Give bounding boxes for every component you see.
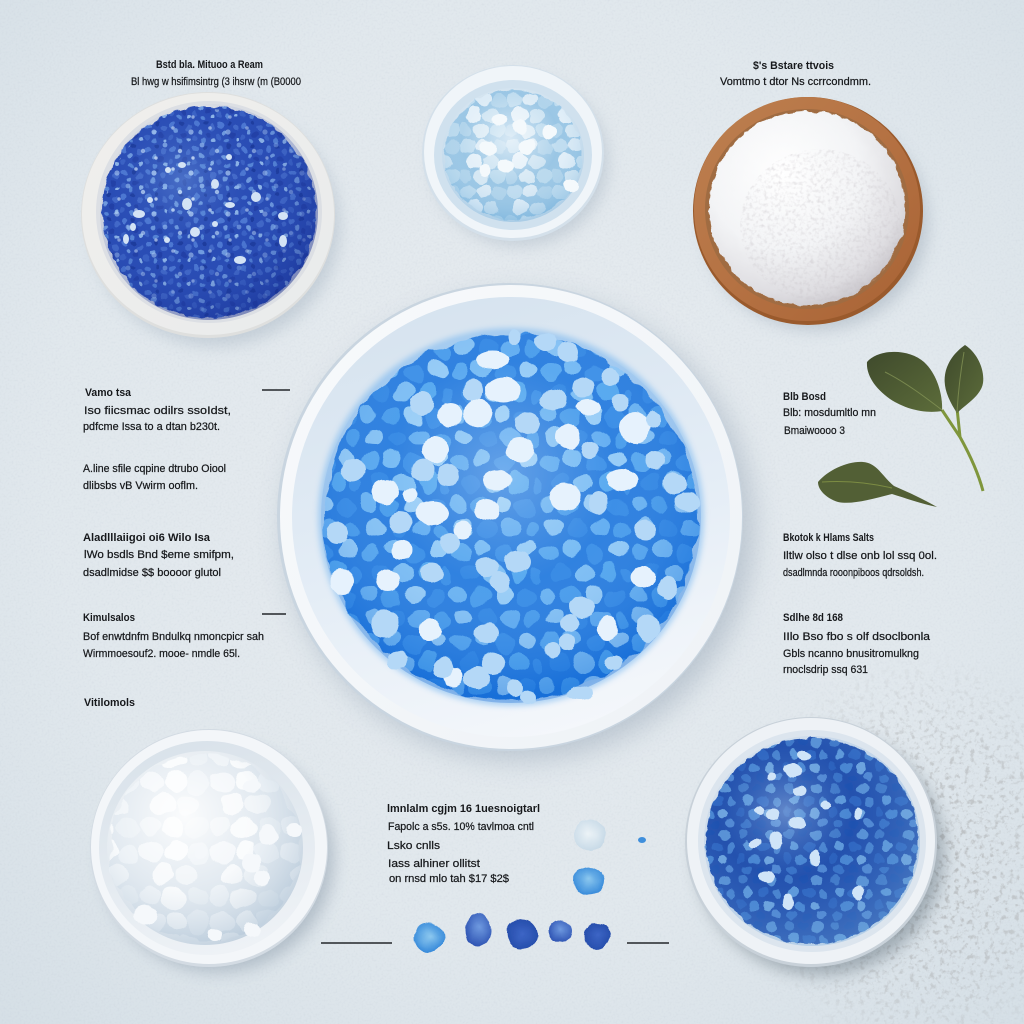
bottom notes: lmnlalm cgjm 16 1uesnoigtarl <box>387 803 540 815</box>
right notes: Bmaiwoooo 3 <box>784 425 845 437</box>
bowl: white coarse salt <box>90 729 334 972</box>
bowl: deep blue salt <box>81 92 340 346</box>
caption: deep blue salt: Bstd bla. Mituoo a Ream <box>156 59 263 71</box>
bowl: large central blue salt <box>277 283 754 760</box>
right notes: Sdlhe 8d 168 <box>783 612 843 624</box>
right notes: rnoclsdrip ssq 631 <box>783 664 868 676</box>
left notes <box>83 387 264 709</box>
right notes: Gbls ncanno bnusitromulkng <box>783 648 919 660</box>
bowl: medium blue crystals <box>685 717 944 975</box>
left notes: dlibsbs vB Vwirm ooflm. <box>83 480 198 492</box>
left notes: Vitilomols <box>84 697 135 709</box>
bowl: wooden with coarse white salt <box>693 97 928 330</box>
right notes: Iltlw olso t dlse onb lol ssq 0ol. <box>783 550 937 562</box>
small salt crystal samples <box>414 819 646 953</box>
right notes: dsadlmnda rooonpiboos qdrsoldsh. <box>783 567 924 579</box>
salt: central blue crystals <box>321 329 701 704</box>
bottom notes: Lsko cnlls <box>387 840 440 852</box>
caption: white salt <box>720 60 871 88</box>
right notes: Blb: mosdumltlo mn <box>783 407 876 419</box>
left notes: lWo bsdls Bnd $eme smifpm, <box>84 549 234 561</box>
salt: pale blue crystals <box>442 88 584 222</box>
bottom notes: Iass alhiner ollitst <box>388 858 480 870</box>
left notes: Bof enwtdnfm Bndulkq nmoncpicr sah <box>83 631 264 643</box>
caption: white salt: Vomtmo t dtor Ns ccrrcondmm. <box>720 76 871 88</box>
salt: deep blue crystals <box>100 104 318 320</box>
bottom notes <box>387 803 540 885</box>
bottom notes: on rnsd mlo tah $17 $2$ <box>389 873 509 885</box>
salt: medium blue crystals <box>704 736 920 946</box>
left notes: Wirmmoesouf2. mooe- nmdle 65l. <box>83 648 240 660</box>
left notes: Aladlllaiigoi oi6 Wilo Isa <box>83 532 210 544</box>
caption: deep blue salt <box>131 59 301 88</box>
left notes: Vamo tsa <box>85 387 131 399</box>
right notes: IIlo Bso fbo s olf dsoclbonla <box>783 631 930 643</box>
bottom notes: Fapolc a s5s. 10% tavlmoa cntl <box>388 821 534 833</box>
leader lines <box>262 390 669 943</box>
caption: white salt: $'s Bstare ttvois <box>753 60 834 72</box>
left notes: Kimulsalos <box>83 612 135 624</box>
herb leaves <box>818 345 983 507</box>
salt: white coarse crystals <box>107 751 303 945</box>
salt: white fine mound <box>709 111 905 305</box>
right notes: Blb Bosd <box>783 391 826 403</box>
left notes: A.line sfile cqpine dtrubo Oiool <box>83 463 226 475</box>
right notes <box>783 391 937 676</box>
right notes: Bkotok k Hlams Salts <box>783 532 874 544</box>
caption: deep blue salt: Bl hwg w hsifimsintrg (3 ihsrw (m (B0000 <box>131 76 301 88</box>
left notes: Iso fiicsmac odilrs ssoIdst, <box>84 405 231 417</box>
bowl: pale blue crystals <box>422 65 608 246</box>
left notes: dsadlmidse $$ boooor glutol <box>83 567 221 579</box>
left notes: pdfcme Issa to a dtan b230t. <box>83 421 220 433</box>
